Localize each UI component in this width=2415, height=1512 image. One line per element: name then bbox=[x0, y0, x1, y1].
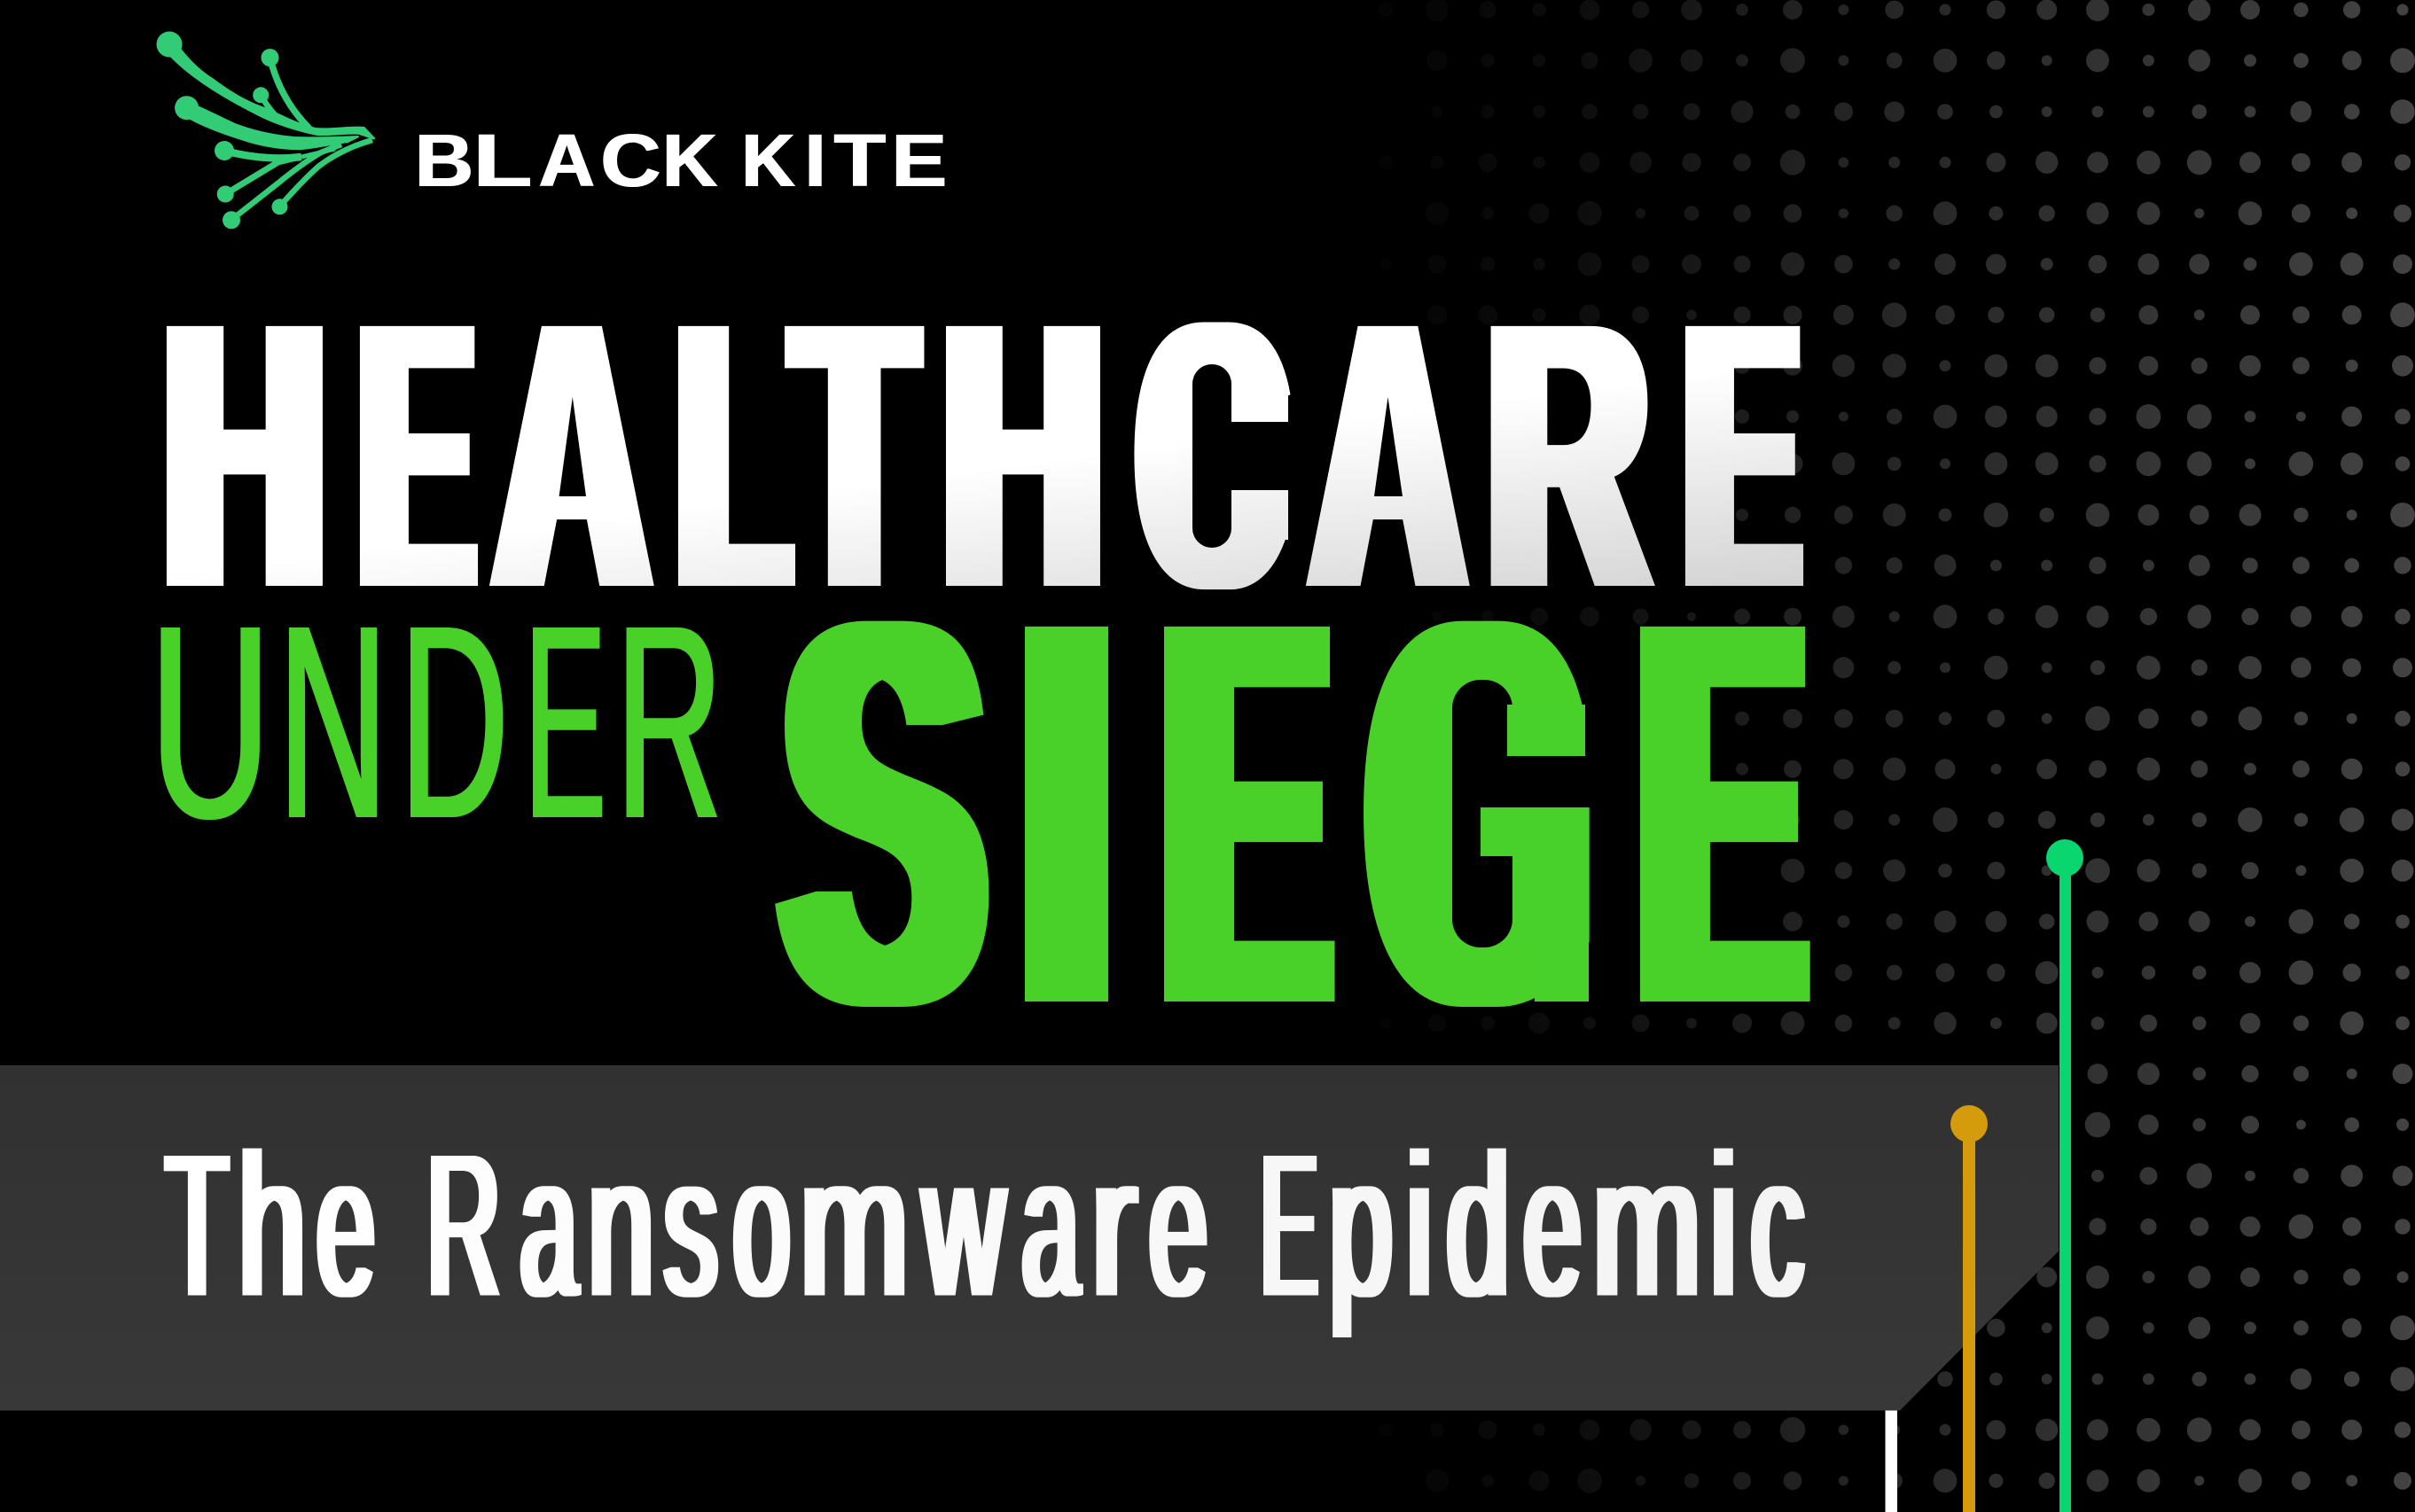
subtitle: The Ransomware Epidemic: T bbox=[166, 1111, 228, 1338]
logo wordmark: I bbox=[805, 119, 825, 202]
subtitle: The Ransomware Epidemic: m bbox=[1592, 1111, 1701, 1338]
logo wordmark: C bbox=[601, 119, 660, 202]
title: UNDER: E bbox=[525, 567, 606, 876]
subtitle: The Ransomware Epidemic: m bbox=[800, 1111, 909, 1338]
subtitle: The Ransomware Epidemic: E bbox=[1261, 1111, 1317, 1338]
subtitle: The Ransomware Epidemic: c bbox=[1751, 1111, 1804, 1338]
logo: Black Kite bbox=[156, 32, 947, 229]
subtitle: The Ransomware Epidemic: o bbox=[733, 1111, 790, 1338]
title: UNDER: R bbox=[616, 567, 723, 876]
title: HEALTHCARE: R bbox=[1489, 245, 1647, 666]
subtitle: The Ransomware Epidemic: e bbox=[1149, 1111, 1208, 1338]
title: HEALTHCARE: C bbox=[1138, 245, 1286, 666]
subtitle: The Ransomware Epidemic: n bbox=[588, 1111, 654, 1338]
infographic canvas: E bbox=[1642, 509, 1801, 1118]
subtitle: The Ransomware Epidemic: e bbox=[317, 1111, 375, 1338]
subtitle: The Ransomware Epidemic: R bbox=[427, 1111, 500, 1338]
white timeline line bbox=[1885, 1411, 1897, 1512]
subtitle: The Ransomware Epidemic: e bbox=[1523, 1111, 1582, 1338]
subtitle: The Ransomware Epidemic: a bbox=[1022, 1111, 1079, 1338]
title: SIEGE: S bbox=[784, 509, 982, 1118]
title: UNDER: D bbox=[400, 567, 509, 876]
subtitle: The Ransomware Epidemic: i bbox=[1406, 1111, 1433, 1338]
title: HEALTHCARE: A bbox=[1313, 245, 1463, 666]
title: HEALTHCARE: A bbox=[496, 245, 647, 666]
logo wordmark: L bbox=[473, 119, 532, 202]
logo wordmark: B bbox=[415, 119, 473, 202]
title: HEALTHCARE: T bbox=[794, 245, 914, 666]
subtitle band bbox=[0, 1065, 2059, 1411]
logo wordmark: K bbox=[741, 119, 795, 202]
green timeline pin bbox=[2046, 839, 2083, 1512]
title: SIEGE: G bbox=[1370, 509, 1589, 1118]
title: HEALTHCARE bbox=[164, 245, 1797, 666]
title: SIEGE: I bbox=[1020, 509, 1113, 1118]
title: HEALTHCARE: E bbox=[361, 245, 472, 666]
subtitle: The Ransomware Epidemic: r bbox=[1091, 1111, 1137, 1338]
icon: kite mark bbox=[156, 32, 375, 229]
gold timeline pin bbox=[1950, 1105, 1988, 1512]
logo wordmark: T bbox=[834, 119, 886, 202]
subtitle: The Ransomware Epidemic: d bbox=[1447, 1111, 1509, 1338]
subtitle: The Ransomware Epidemic: i bbox=[1710, 1111, 1737, 1338]
subtitle: The Ransomware Epidemic: w bbox=[922, 1111, 1004, 1338]
logo wordmark: A bbox=[539, 119, 595, 202]
title: SIEGE bbox=[784, 509, 1801, 1118]
title: UNDER: N bbox=[278, 567, 387, 876]
title: HEALTHCARE: L bbox=[678, 245, 788, 666]
logo wordmark: E bbox=[892, 119, 947, 202]
subtitle: The Ransomware Epidemic: p bbox=[1330, 1111, 1393, 1338]
subtitle: The Ransomware Epidemic: s bbox=[664, 1111, 718, 1338]
logo wordmark: K bbox=[662, 119, 717, 202]
title: HEALTHCARE: H bbox=[164, 245, 325, 666]
infographic canvas: E bbox=[1686, 245, 1797, 666]
subtitle: The Ransomware Epidemic: h bbox=[238, 1111, 306, 1338]
halftone dot pattern bbox=[1378, 0, 2415, 1493]
title: SIEGE: E bbox=[1166, 509, 1326, 1118]
title: UNDER: U bbox=[150, 567, 271, 876]
title: HEALTHCARE: H bbox=[943, 245, 1103, 666]
subtitle: The Ransomware Epidemic: a bbox=[520, 1111, 577, 1338]
